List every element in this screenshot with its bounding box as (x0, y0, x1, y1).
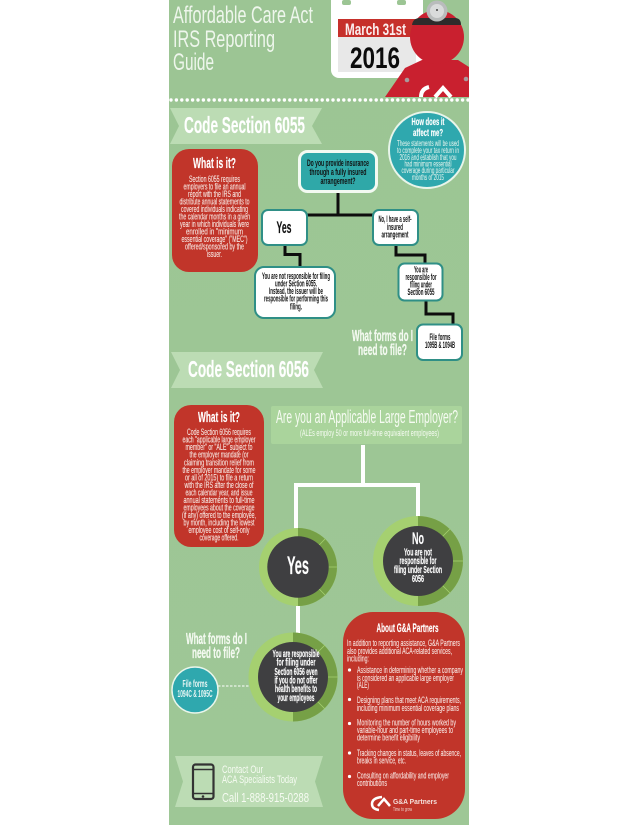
banner: applicable large employer: Are you an Applicable Large Employer? (276, 407, 458, 427)
panel: what is it 6056: coverage offered. (200, 532, 238, 542)
donut: responsible: for filing under (276, 658, 316, 668)
box: no self-insured: insured (387, 222, 403, 232)
donut: responsible (248, 632, 338, 722)
box: file forms 1095B: 1095B & 1094B (425, 340, 455, 350)
panel: about G&A Partners: In addition to reporting assistance, G&A Partners (347, 638, 460, 648)
panel: background (169, 0, 469, 825)
callout: how does it affect me: months of 2015 (412, 172, 444, 182)
bullet list: Assistance in determining whether a company (357, 665, 463, 675)
ribbon: Code Section 6055: Code Section 6055 (184, 112, 305, 138)
box: yes (262, 210, 307, 245)
donut: no: You are not (404, 548, 432, 558)
box: file forms 1095B: File forms (430, 332, 450, 342)
box: you are responsible (398, 264, 442, 300)
heading: what forms 6055 (352, 328, 413, 359)
circle: file forms 1094C (172, 667, 218, 713)
icon: phone (193, 764, 214, 799)
bullet list: Designing plans that meet ACA requirements, (357, 695, 461, 705)
box: not responsible (255, 267, 335, 318)
panel: what is it 6055: What is it? (193, 156, 236, 172)
question box (300, 152, 376, 192)
panel: what is it 6056: employees about the coverage (184, 502, 254, 512)
donut: responsible: your employees (278, 693, 315, 704)
bullet list: (ALE) (357, 680, 369, 690)
panel: what is it 6056: annual statements to full-time (184, 495, 254, 505)
box: you are responsible: You are (414, 264, 428, 274)
panel: what is it 6056: (if any) offered to the employee, (182, 510, 256, 520)
panel: what is it 6056: What is it? (198, 410, 240, 426)
bullet list: breaks in service, etc. (357, 756, 406, 766)
box: you are responsible: filing under (410, 280, 432, 290)
callout: how does it affect me (389, 112, 465, 188)
box: no self-insured: arrangement (382, 230, 408, 240)
panel: about G&A Partners: About G&A Partners (376, 621, 439, 635)
ribbon: Code Section 6055 (170, 108, 322, 144)
banner: applicable large employer: (ALEs employ 50 or more full-time equivalent employees) (300, 428, 439, 438)
bullet list: Consulting on affordability and employer (357, 770, 449, 780)
ribbon: contact: ACA Specialists Today (222, 774, 297, 786)
panel: what is it 6056: employee cost of self-only (188, 525, 250, 535)
panel: what is it 6056: the employer mandate (or (190, 450, 248, 460)
bullet list: is considered an applicable large employer (357, 673, 454, 683)
ribbon: contact (175, 756, 323, 807)
box: not responsible: filing. (290, 302, 302, 312)
box: you are responsible: Section 6055 (408, 287, 434, 297)
bullet list: Monitoring the number of hours worked by (357, 718, 456, 728)
ribbon: contact: Contact Our (222, 764, 263, 776)
panel: what is it 6055: distribute annual statements to (180, 196, 250, 206)
callout: how does it affect me: How does it (412, 116, 445, 128)
question box: Do you provide insurance (307, 158, 369, 168)
callout: how does it affect me: coverage during particular (402, 165, 455, 175)
icon: calendar: March 31st (345, 20, 406, 39)
title: Affordable Care Act (173, 2, 313, 29)
callout: how does it affect me: These statements will be used (397, 138, 459, 148)
ribbon: contact: Call 1-888-915-0288 (222, 790, 309, 805)
question box: through a fully insured (310, 167, 366, 177)
panel: what is it 6056: member" or "ALE" subject to (186, 442, 252, 452)
icon: calendar: 2016 (350, 42, 400, 75)
panel: what is it 6055: covered individuals indicating (181, 204, 248, 214)
logo: G&A Partners: Time to grow (393, 807, 412, 813)
panel: what is it 6055 (172, 149, 258, 272)
donut: responsible: Section 6056 even (274, 667, 318, 678)
bullet list (348, 665, 463, 788)
heading: what forms 6056: need to file? (192, 645, 240, 662)
donut: responsible: You are responsible (272, 649, 320, 660)
panel: about G&A Partners: also provides additional ACA-related services, (347, 646, 452, 656)
ribbon: Code Section 6056 (171, 352, 323, 388)
panel: what is it 6056: the employer mandate for some (182, 465, 256, 475)
logo: G&A Partners: G&A Partners (393, 799, 437, 806)
bullet list: determine benefit eligibility (357, 732, 420, 742)
donut: yes (259, 528, 337, 606)
donut: no (373, 516, 463, 606)
heading: what forms 6056: What forms do I (186, 631, 247, 648)
callout: how does it affect me: to complete your tax return in (397, 145, 459, 155)
panel: what is it 6055: report with the IRS and (188, 189, 241, 199)
bullet list: including minimum essential coverage plans (357, 703, 459, 713)
banner: applicable large employer (271, 406, 462, 444)
panel: what is it 6056 (174, 405, 264, 547)
panel: what is it 6056: with the IRS after the close of (184, 480, 254, 490)
box: yes: Yes (276, 218, 292, 237)
heading: what forms 6055: need to file? (358, 342, 407, 359)
question box: arrangement? (320, 176, 356, 186)
circle: file forms 1094C: 1094C & 1095C (178, 689, 212, 700)
panel: what is it 6055: Section 6055 requires (189, 174, 240, 184)
heading: what forms 6056 (186, 631, 247, 662)
panel: what is it 6055: enrolled in "minimum (186, 226, 243, 236)
bullet list: Tracking changes in status, leaves of absence, (357, 748, 461, 758)
box: not responsible: You are not responsible for filing (262, 271, 330, 281)
panel: what is it 6055: employers to file an annual (184, 182, 246, 192)
box: file forms 1095B (417, 324, 462, 360)
title: IRS Reporting (173, 26, 275, 53)
panel: what is it 6055: essential coverage" ("MEC") (182, 234, 248, 244)
bullet list: contributions (357, 778, 387, 788)
callout: how does it affect me: 2016 and establish that you (400, 152, 457, 162)
title: Guide (173, 49, 214, 76)
title (173, 2, 313, 76)
donut: no: filing under Section (394, 565, 442, 576)
ribbon: Code Section 6056: Code Section 6056 (188, 356, 309, 382)
panel: what is it 6055: year in which individuals were (180, 219, 249, 229)
dashed connector (218, 685, 250, 687)
panel: what is it 6055: issuer. (207, 249, 222, 259)
callout: how does it affect me: had minimum essential (404, 158, 452, 168)
heading: what forms 6055: What forms do I (352, 328, 413, 345)
box: no self-insured (373, 210, 418, 245)
donut: responsible: health benefits to (275, 684, 317, 695)
box: no self-insured: No, I have a self- (378, 214, 412, 224)
box: not responsible: responsible for performing this (264, 294, 328, 304)
panel: what is it 6056: or all of 2015) to file a return (185, 472, 253, 482)
icon: calendar (331, 0, 423, 78)
donut: no: 6056 (412, 574, 424, 585)
flow connectors 6055 (285, 193, 453, 325)
box: you are responsible: responsible for (406, 272, 437, 282)
donut: responsible: if you do not offer (274, 676, 318, 686)
donut: no: No (412, 529, 424, 548)
box: not responsible: Instead, the issuer will be (269, 286, 323, 296)
panel: what is it 6056: each "applicable large employer (182, 434, 256, 444)
bullet list: variable-hour and part-time employees to (357, 725, 453, 735)
box: not responsible: under Section 6055. (275, 278, 317, 288)
panel: what is it 6056: Code Section 6056 requires (187, 427, 251, 437)
panel: about G&A Partners (343, 612, 465, 819)
callout: how does it affect me: affect me? (413, 127, 443, 139)
panel: what is it 6055: offered/sponsored by the (185, 242, 244, 252)
flow connectors 6056 (296, 445, 418, 633)
dotted divider (171, 98, 469, 102)
panel: about G&A Partners: including: (347, 654, 369, 664)
donut: no: responsible for (400, 556, 437, 567)
panel: what is it 6056: claiming transition relief from (184, 458, 254, 468)
logo: G&A Partners (372, 797, 437, 813)
panel: what is it 6056: each calendar year, and issue (186, 488, 252, 498)
panel: what is it 6056: by month, including the lowest (184, 518, 255, 528)
donut: yes: Yes (287, 552, 309, 580)
panel: what is it 6055: the calendar months in a given (179, 212, 250, 222)
circle: file forms 1094C: File forms (182, 679, 208, 690)
icon: doctor figure (385, 0, 469, 97)
